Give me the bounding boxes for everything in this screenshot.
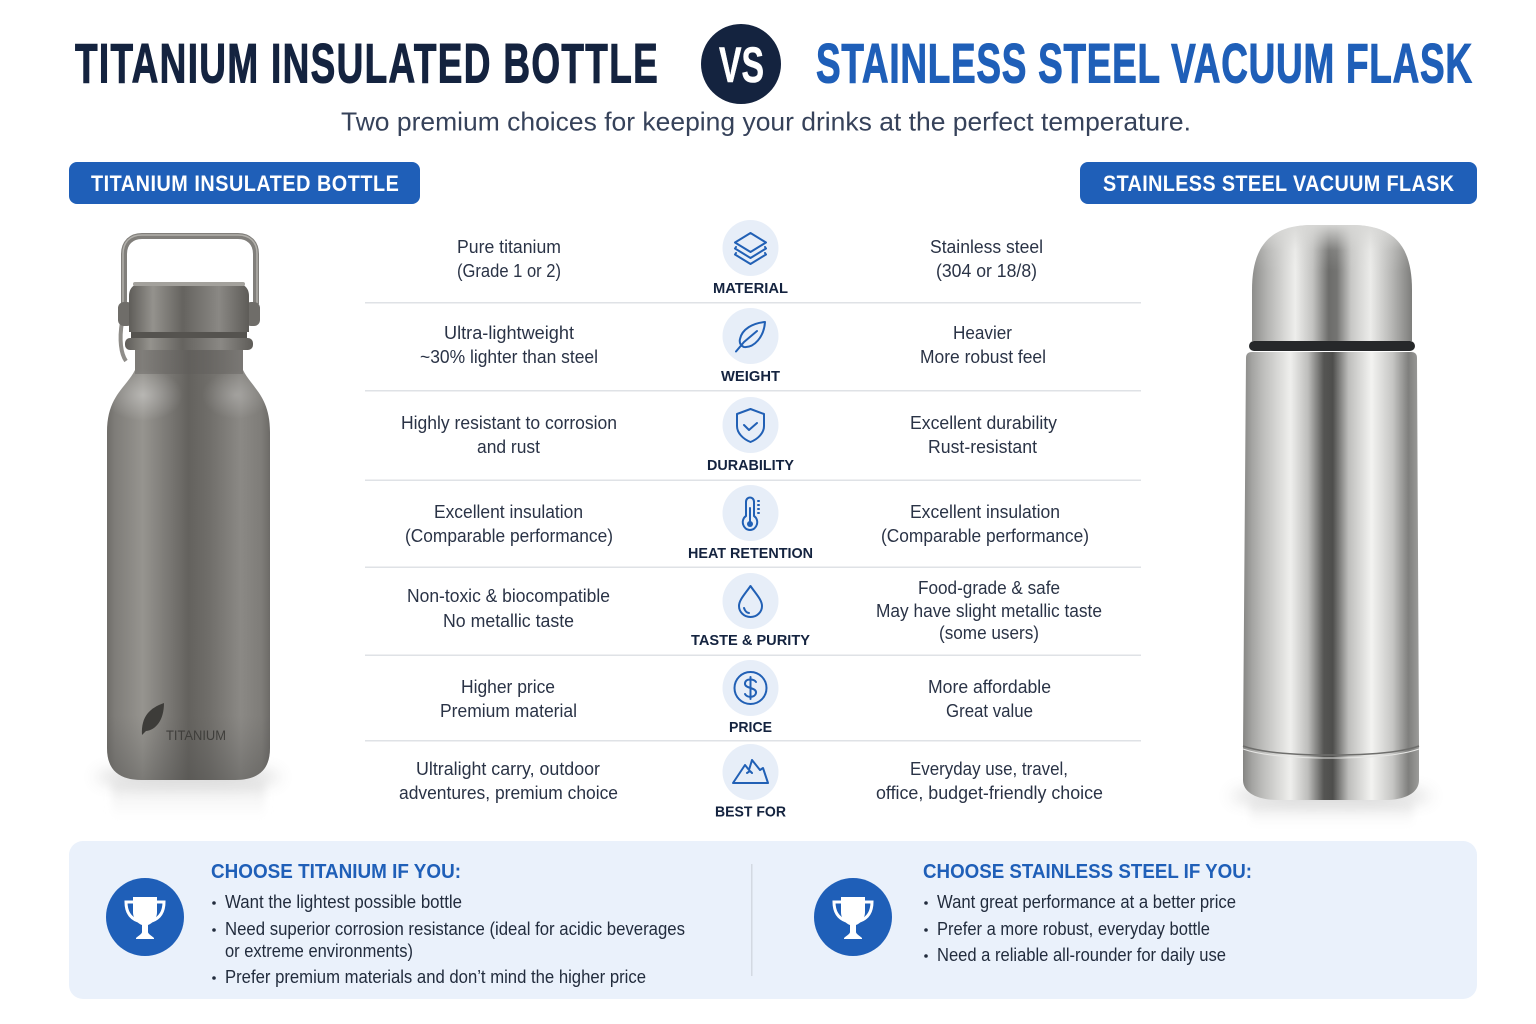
row: price	[440, 660, 1051, 736]
row: weight: More robust feel	[920, 347, 1046, 367]
panel: recommendations	[69, 841, 1477, 999]
illustration: stainless flask	[1231, 225, 1431, 832]
row: taste and purity: May have slight metallic taste	[876, 601, 1102, 621]
row: weight: Ultra-lightweight	[444, 323, 574, 343]
list: stainless reasons: Prefer a more robust, everyday bottle	[937, 919, 1210, 939]
row: material: (304 or 18/8)	[936, 261, 1037, 281]
row: heat retention: Excellent insulation	[434, 502, 583, 522]
list: stainless reasons: Need a reliable all-rounder for daily use	[937, 945, 1226, 965]
list: titanium reasons: Prefer premium materials and don’t mind the higher price	[225, 967, 646, 987]
row: material: (Grade 1 or 2)	[457, 261, 561, 281]
row: price: Great value	[946, 701, 1033, 721]
row: price: More affordable	[928, 677, 1051, 697]
row: material: Pure titanium	[457, 237, 561, 257]
row: material: Stainless steel	[930, 237, 1043, 257]
pill: stainless column heading: STAINLESS STEEL VACUUM FLASK	[1103, 172, 1454, 196]
row: durability: Rust-resistant	[928, 437, 1037, 457]
icon: shield	[722, 397, 778, 453]
row: best for: BEST FOR	[715, 804, 786, 820]
row: durability: Highly resistant to corrosion	[401, 413, 617, 433]
icon: mountains	[722, 744, 778, 800]
row: heat retention: (Comparable performance)	[881, 526, 1089, 546]
row: best for: adventures, premium choice	[399, 783, 618, 803]
row: taste and purity: No metallic taste	[443, 611, 574, 631]
row: heat retention	[405, 485, 1089, 562]
list: titanium reasons: Need superior corrosion resistance (ideal for acidic beverages	[225, 919, 685, 939]
row: material: MATERIAL	[713, 280, 788, 297]
pill: stainless column heading	[1080, 162, 1477, 204]
icon: feather	[722, 308, 778, 364]
row: taste and purity: Food-grade & safe	[918, 578, 1060, 598]
illustration: titanium bottle	[96, 235, 280, 826]
bottle wordmark: TITANIUM	[166, 728, 226, 743]
pill: titanium column heading	[69, 162, 420, 204]
comparison table dividers	[365, 302, 1141, 742]
row: best for: office, budget-friendly choice	[876, 783, 1103, 803]
row: weight: ~30% lighter than steel	[420, 347, 598, 367]
title: stainless steel vacuum flask: STAINLESS STEEL VACUUM FLASK	[816, 33, 1472, 95]
icon: dollar coin	[722, 660, 778, 716]
row: durability: and rust	[477, 437, 540, 457]
list: titanium reasons	[212, 892, 685, 987]
title: titanium insulated bottle: TITANIUM INSULATED BOTTLE	[75, 33, 658, 95]
row: taste and purity: (some users)	[939, 623, 1039, 643]
icon: water drop	[722, 573, 778, 629]
VS badge: VS	[719, 37, 764, 93]
row: price: PRICE	[729, 719, 772, 736]
row: taste and purity: Non-toxic & biocompatible	[407, 586, 610, 606]
row: weight	[420, 308, 1046, 385]
icon: trophy left	[106, 878, 184, 956]
row: material	[457, 220, 1043, 297]
heading: choose titanium: CHOOSE TITANIUM IF YOU:	[211, 861, 461, 883]
row: best for	[399, 744, 1103, 820]
row: price: Premium material	[440, 701, 577, 721]
icon: leaf logo	[142, 703, 164, 735]
row: taste and purity: TASTE & PURITY	[691, 632, 810, 649]
row: best for: Ultralight carry, outdoor	[416, 759, 600, 779]
row: heat retention: HEAT RETENTION	[688, 545, 813, 562]
subtitle: Two premium choices for keeping your drinks at the perfect temperature.	[341, 106, 1191, 136]
row: heat retention: (Comparable performance)	[405, 526, 613, 546]
row: heat retention: Excellent insulation	[910, 502, 1060, 522]
icon: layers	[722, 220, 778, 276]
icon: trophy right	[814, 878, 892, 956]
list: titanium reasons: or extreme environments)	[225, 941, 413, 961]
icon: thermometer	[722, 485, 778, 541]
row: durability: DURABILITY	[707, 457, 794, 474]
heading: choose stainless: CHOOSE STAINLESS STEEL IF YOU:	[923, 861, 1252, 883]
list: stainless reasons: Want great performance at a better price	[937, 892, 1236, 912]
row: weight: Heavier	[953, 323, 1012, 343]
list: stainless reasons	[924, 892, 1236, 965]
pill: titanium column heading: TITANIUM INSULATED BOTTLE	[91, 172, 399, 196]
VS badge	[701, 24, 781, 104]
list: titanium reasons: Want the lightest possible bottle	[225, 892, 462, 912]
row: durability	[401, 397, 1057, 474]
row: price: Higher price	[461, 677, 555, 697]
row: best for: Everyday use, travel,	[910, 759, 1068, 779]
row: taste and purity	[407, 573, 1102, 649]
row: weight: WEIGHT	[721, 368, 780, 385]
row: durability: Excellent durability	[910, 413, 1057, 433]
